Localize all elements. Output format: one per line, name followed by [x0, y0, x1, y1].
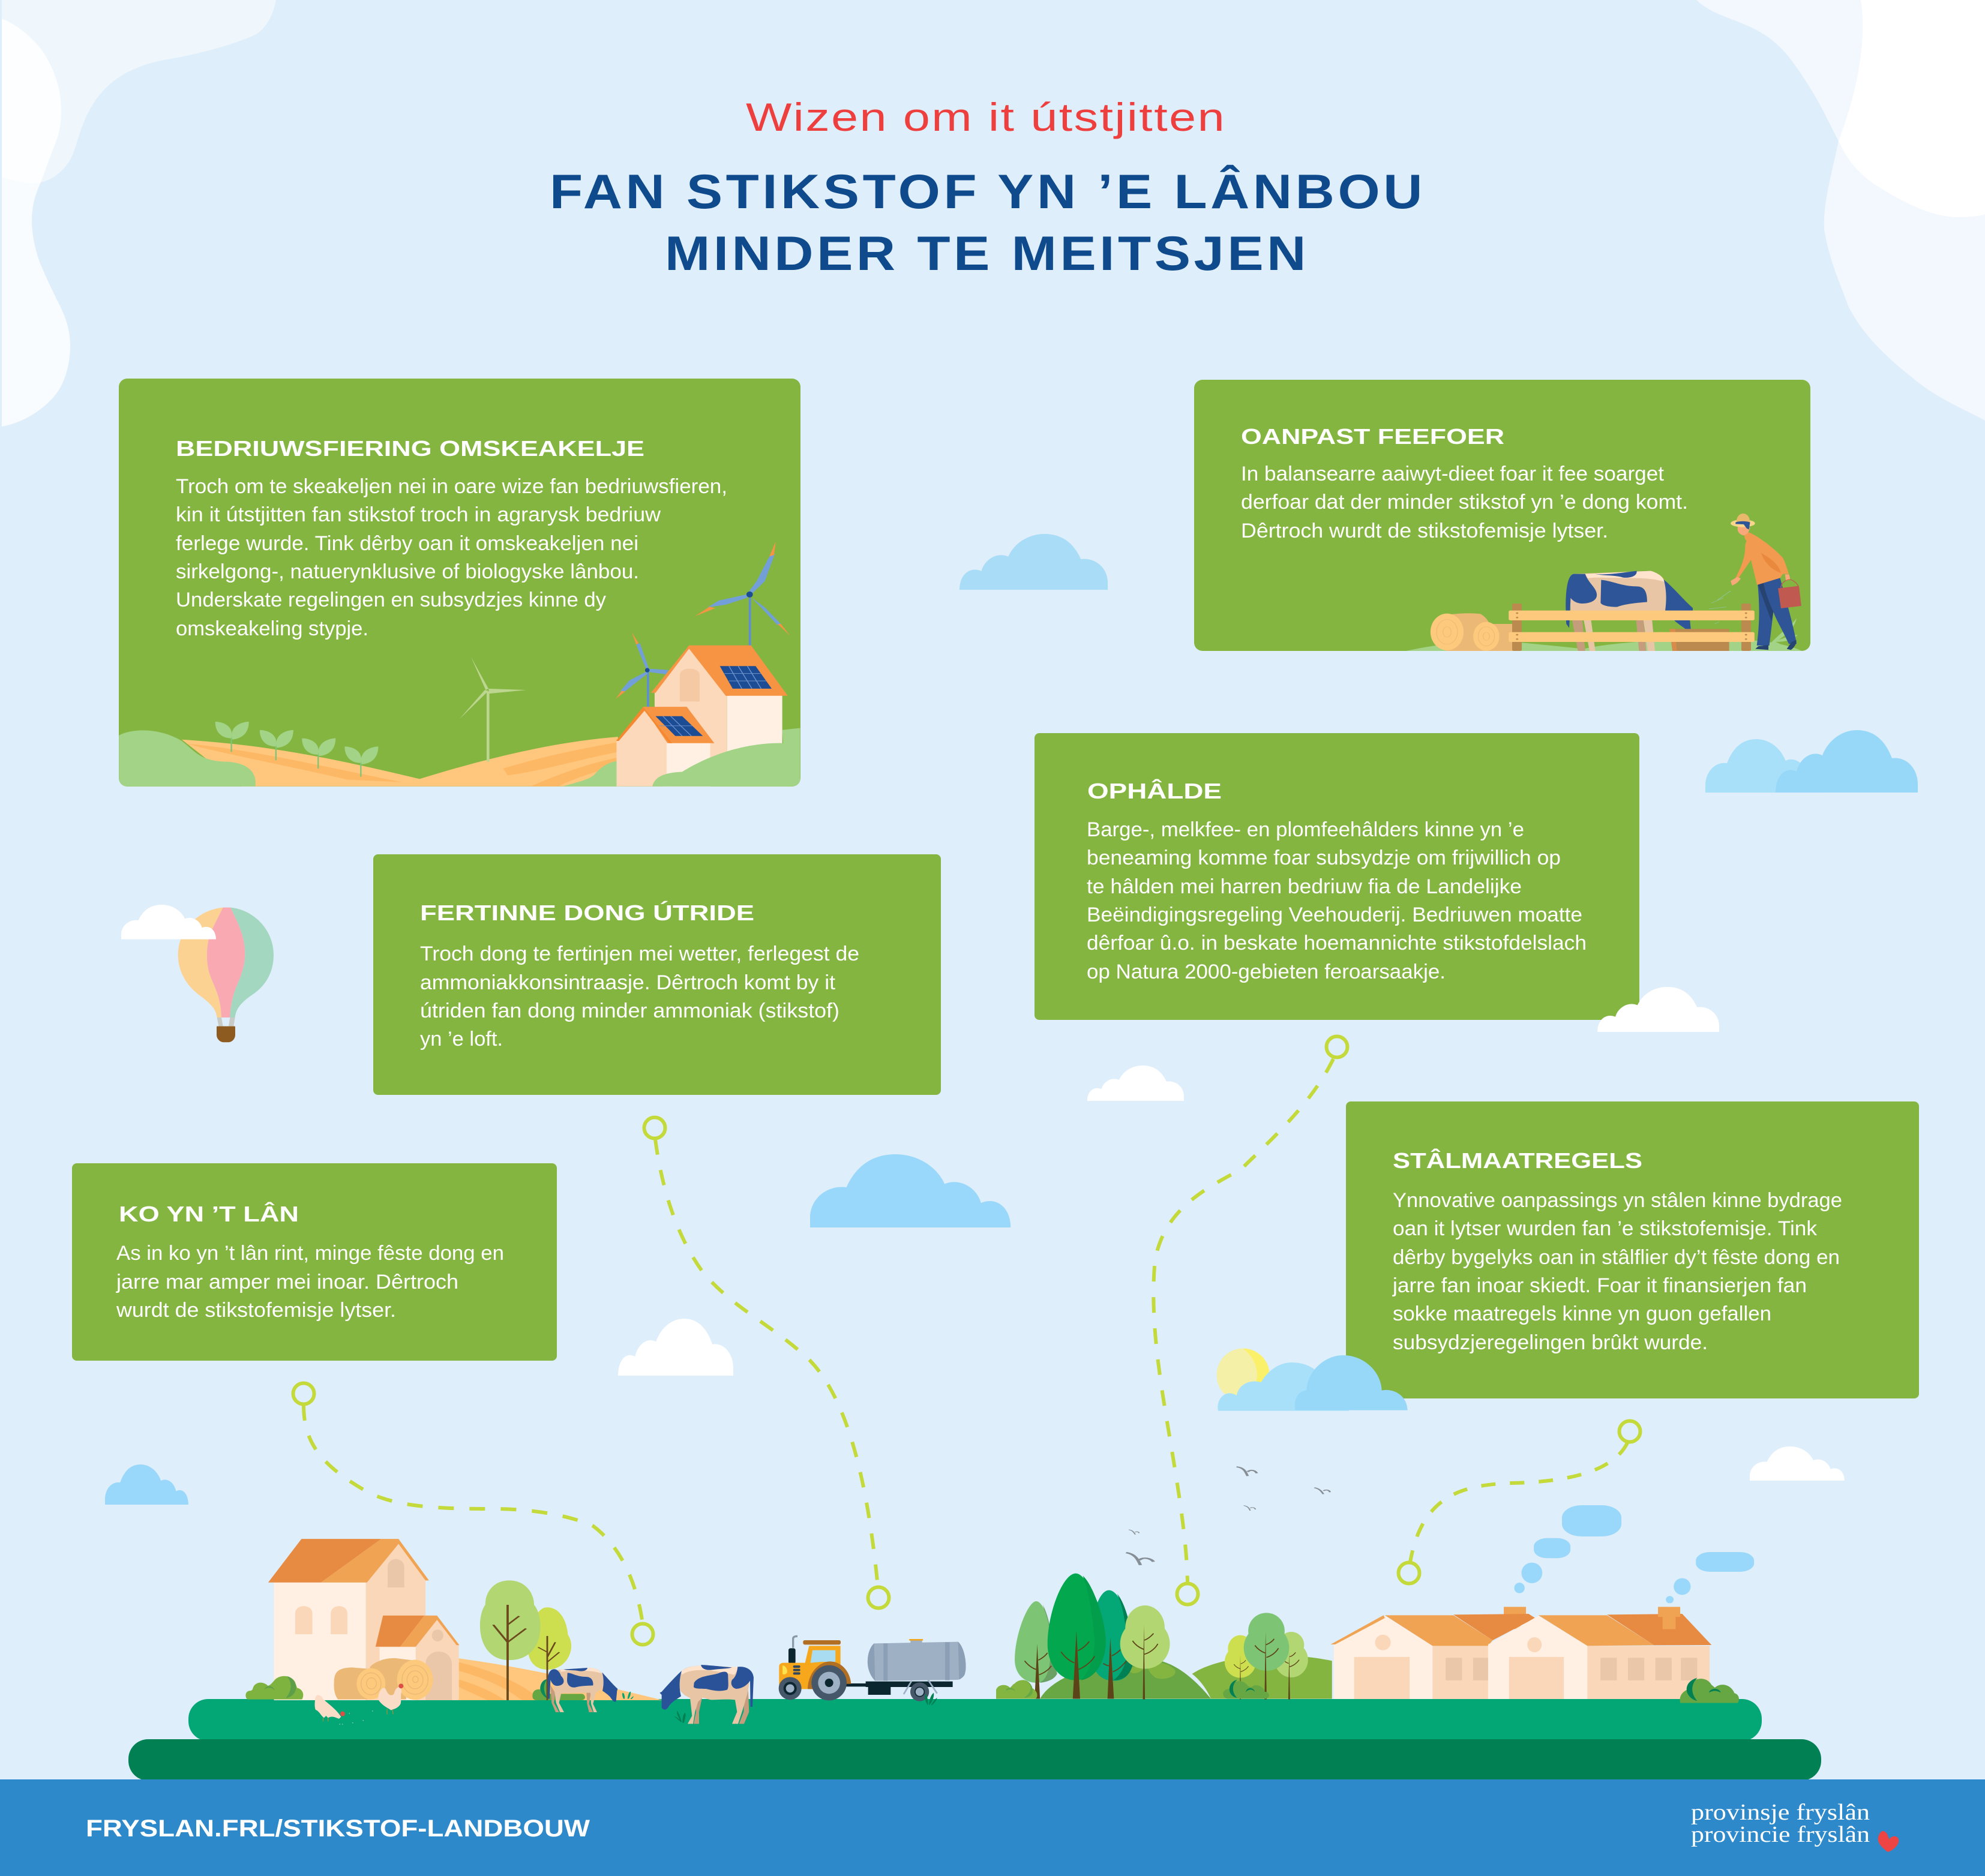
panel: fertinne dong útride — [373, 854, 941, 1095]
footer link: FRYSLAN.FRL/STIKSTOF-LANDBOUW — [86, 1815, 590, 1842]
body text: sirkelgong-, natuerynklusive of biologyske lânbou. — [176, 560, 639, 583]
body text: ferlege wurde. Tink dêrby oan it omskeakeljen nei — [176, 532, 638, 555]
heading: BEDRIUWSFIERING OMSKEAKELJE — [176, 436, 644, 461]
footer band — [0, 1779, 1985, 1876]
body text: dêrfoar û.o. in beskate hoemannichte stikstofdelslach — [1087, 932, 1587, 954]
title: MINDER TE MEITSJEN — [665, 227, 1309, 281]
body text: dêrby bygelyks oan in stâlflier dy’t fêste dong en — [1393, 1246, 1840, 1269]
chimney smoke — [1514, 1505, 1754, 1603]
body text: Troch om te skeakeljen nei in oare wize fan bedriuwsfieren, — [176, 475, 727, 498]
body text: op Natura 2000-gebieten feroarsaakje. — [1087, 960, 1446, 983]
cloud: white by balloon — [121, 905, 216, 939]
logo: provinsje fryslân — [1691, 1800, 1870, 1825]
body text: Dêrtroch wurdt de stikstofemisje lytser. — [1241, 520, 1608, 542]
body text — [1241, 463, 1688, 542]
body text: yn ’e loft. — [420, 1028, 503, 1050]
cloud: blue lower left — [105, 1464, 188, 1505]
bush behind cow — [532, 1679, 585, 1700]
connector: ophâlde to trees — [1153, 1037, 1348, 1604]
body text: sokke maatregels kinne yn guon gefallen — [1393, 1302, 1771, 1325]
body text: Underskate regelingen en subsydzjes kinne dy — [176, 589, 606, 611]
ground: lower strip — [128, 1739, 1821, 1781]
chickens — [315, 1683, 403, 1724]
body text: omskeakeling stypje. — [176, 617, 368, 640]
heading: OPHÂLDE — [1087, 778, 1222, 803]
heading: KO YN ’T LÂN — [119, 1201, 299, 1226]
trees by farmhouse — [480, 1580, 571, 1700]
connector: fertinne dong to tractor — [644, 1117, 889, 1608]
panel: stâlmaatregels — [1346, 1101, 1919, 1398]
bush right — [1680, 1678, 1739, 1703]
body text: wurdt de stikstofemisje lytser. — [116, 1299, 396, 1322]
birds — [1126, 1467, 1330, 1565]
panel: oanpast feefoer — [1194, 380, 1810, 651]
heading: STÂLMAATREGELS — [1393, 1148, 1642, 1173]
body text: As in ko yn ’t lân rint, minge fêste dong en — [116, 1242, 504, 1265]
body text — [420, 942, 859, 1050]
title: Wizen om it útstjitten — [746, 95, 1226, 139]
cloud: blue large centre — [810, 1154, 1011, 1227]
hot air balloon — [178, 908, 274, 1042]
body text: derfoar dat der minder stikstof yn ’e dong komt. — [1241, 491, 1688, 514]
body text: Ynnovative oanpassings yn stâlen kinne bydrage — [1393, 1189, 1842, 1212]
body text: subsydzjeregelingen brûkt wurde. — [1393, 1331, 1708, 1354]
logo — [1691, 1800, 1899, 1852]
cloud: white small centre — [1087, 1065, 1184, 1101]
body text: te hâlden mei harren bedriuw fia de Landelijke — [1087, 875, 1522, 898]
barn — [1330, 1607, 1711, 1699]
body text: beneaming komme foar subsydzje om frijwillich op — [1087, 847, 1561, 869]
body text: Troch dong te fertinjen mei wetter, ferlegest de — [420, 942, 859, 965]
body text — [1087, 818, 1587, 983]
sun with clouds — [1217, 1349, 1408, 1411]
body text: kin it útstjitten fan stikstof troch in agrarysk bedriuw — [176, 503, 661, 526]
logo heart — [1878, 1831, 1899, 1852]
heading: FERTINNE DONG ÚTRIDE — [420, 900, 754, 925]
body text: oan it lytser wurden fan ’e stikstofemisje. Tink — [1393, 1217, 1818, 1240]
birds, barn and smoke — [1126, 1467, 1754, 1703]
bush and hay bales — [245, 1658, 433, 1700]
cloud: blue right — [1705, 730, 1918, 793]
connector: ko yn 't lân to farm — [293, 1383, 653, 1645]
panel: ophâlde — [1035, 733, 1639, 1020]
panel: bedriuwsfiering omskeakelje — [119, 379, 800, 787]
illustration: farm with wind turbines — [119, 541, 800, 787]
body text — [116, 1242, 504, 1322]
panel: ko yn 't lân — [72, 1163, 557, 1361]
cloud: white lower centre — [618, 1319, 733, 1376]
body text: In balansearre aaiwyt-dieet foar it fee soarget — [1241, 463, 1665, 485]
title: FAN STIKSTOF YN ’E LÂNBOU — [550, 164, 1426, 219]
body text: útriden fan dong minder ammoniak (stikstof) — [420, 999, 839, 1022]
logo: provincie fryslân — [1691, 1822, 1870, 1847]
title — [550, 95, 1426, 281]
background blobs — [2, 0, 1985, 427]
body text: Beëindigingsregeling Veehouderij. Bedriuwen moatte — [1087, 904, 1582, 926]
body text: jarre fan inoar skiedt. Foar it finansierjen fan — [1392, 1274, 1807, 1297]
body text: ammoniakkonsintraasje. Dêrtroch komt by it — [420, 971, 836, 994]
tractor with tank — [779, 1636, 966, 1705]
body text: Barge-, melkfee- en plomfeehâlders kinne yn ’e — [1087, 818, 1524, 841]
body text: jarre mar amper mei inoar. Dêrtroch — [116, 1271, 458, 1293]
cloud: white over ophâlde panel — [1597, 987, 1719, 1032]
ground: upper strip — [188, 1699, 1762, 1741]
cloud: sky blue centre top — [959, 534, 1108, 590]
cows grazing — [548, 1665, 754, 1724]
illustration: farmer feeding cow — [1407, 514, 1802, 651]
farmhouse and field — [268, 1539, 662, 1700]
body text — [1392, 1189, 1842, 1354]
connector: stâlmaatregels to barn — [1398, 1421, 1641, 1584]
heading: OANPAST FEEFOER — [1241, 424, 1504, 449]
body text — [176, 475, 727, 640]
forest — [996, 1574, 1332, 1700]
cloud: white lower right — [1750, 1446, 1845, 1481]
